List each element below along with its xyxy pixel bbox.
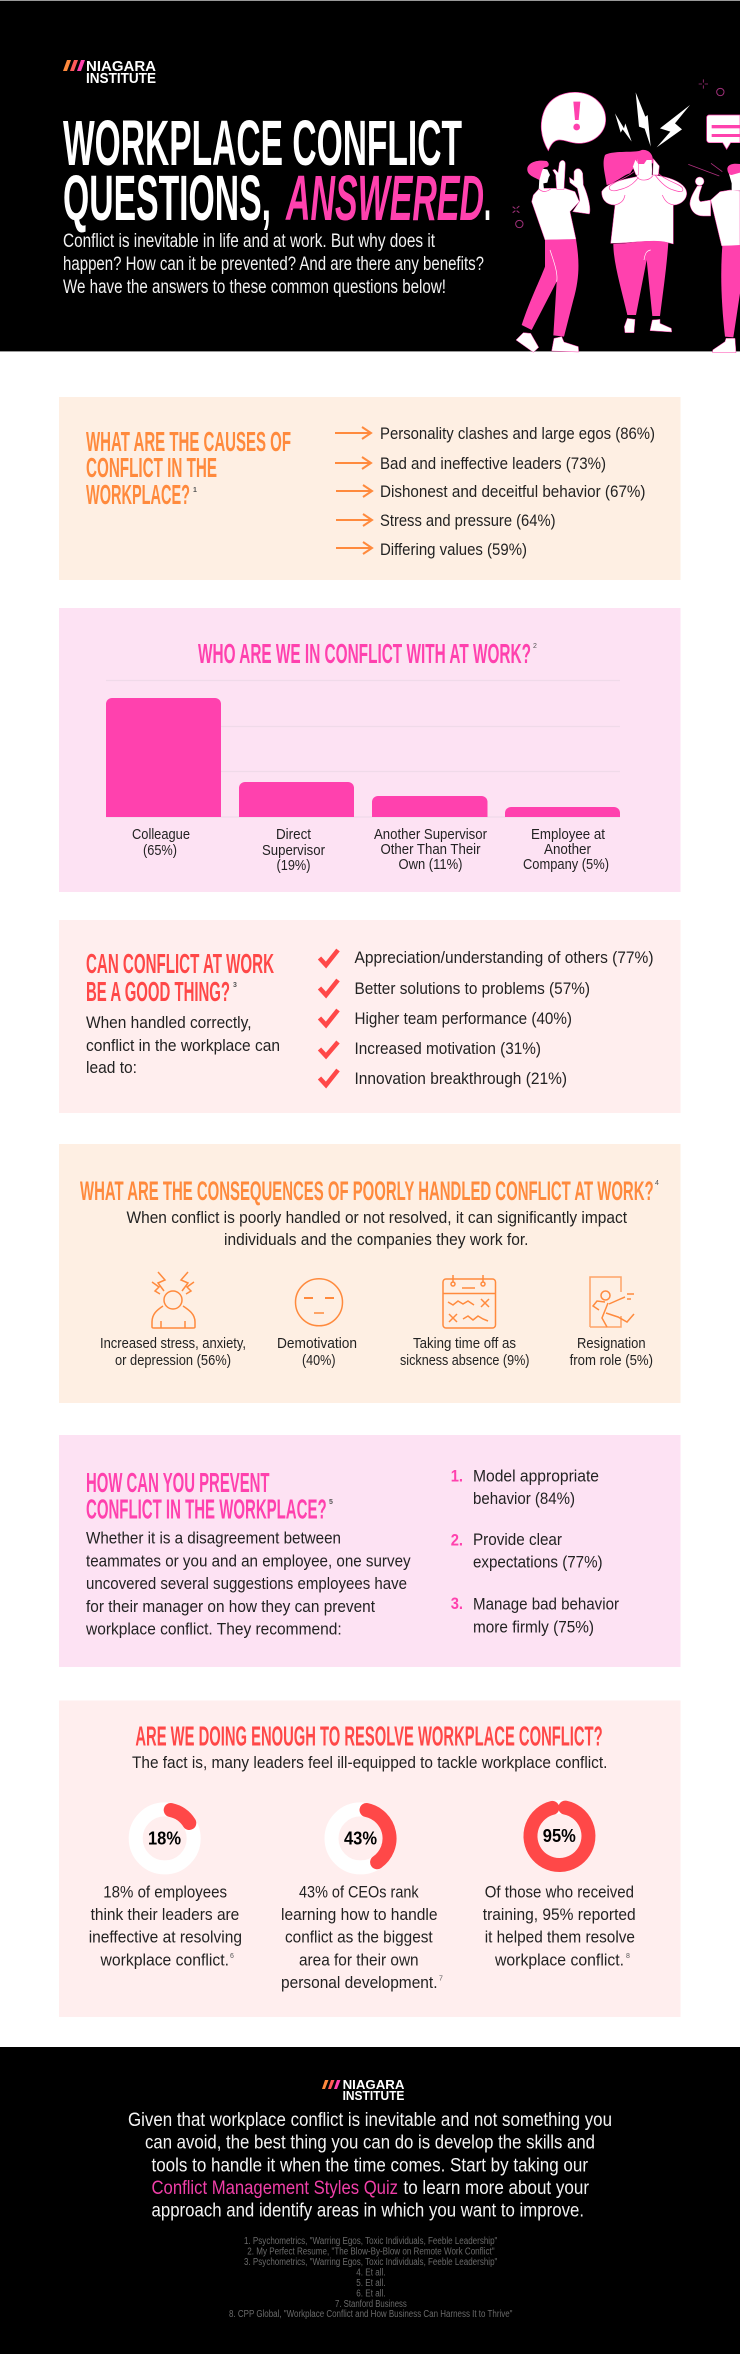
icon: person leaving through door [590, 1277, 634, 1327]
consequence labels: Demotivation [277, 1335, 357, 1352]
list: benefits: Better solutions to problems (57%) [354, 979, 590, 998]
heading: good thing [86, 948, 274, 1007]
logo: NIAGARA [86, 58, 156, 75]
list: causes: Stress and pressure (64%) [380, 511, 556, 530]
panel: can conflict be good [59, 920, 680, 1113]
chart labels: Own (11%) [398, 856, 462, 873]
chart labels: (65%) [143, 842, 177, 859]
text: prevent body: for their manager on how they can prevent [86, 1597, 375, 1616]
closing text: approach and identify areas in which you want to improve. [152, 2201, 584, 2222]
heading: causes: 1 [193, 487, 197, 494]
intro text: We have the answers to these common questions below! [63, 277, 446, 298]
intro text: happen? How can it be prevented? And are there any benefits? [63, 254, 484, 275]
text: 95% caption: Of those who received [485, 1882, 634, 1901]
text: when handled correctly [86, 1013, 280, 1077]
heading: consequences: 4 [655, 1180, 659, 1187]
list: causes: Differing values (59%) [380, 540, 527, 559]
panel: who are we in conflict with [59, 608, 680, 892]
closing text: to learn more about your [404, 2178, 590, 2199]
text: leaders ill-equipped: The fact is, many leaders feel ill-equipped to tackle workplace conflict. [132, 1753, 607, 1772]
logo: INSTITUTE [86, 70, 156, 87]
consequence labels [100, 1335, 653, 1369]
text: 43% caption: conflict as the biggest [285, 1928, 433, 1947]
heading: causes: CONFLICT IN THE [86, 452, 217, 483]
illustration: three people in conflict [513, 79, 740, 353]
footnotes: 6. Et all. [356, 2289, 386, 2300]
text: 95% caption: it helped them resolve [485, 1928, 635, 1947]
text: prevent body: teammates or you and an employee, one survey [86, 1551, 411, 1570]
closing text: can avoid, the best thing you can do is develop the skills and [145, 2133, 595, 2154]
text: 95% caption: workplace conflict. [494, 1951, 624, 1970]
text: prevent body: uncovered several suggestions employees have [86, 1574, 407, 1593]
heading: prevent: 5 [329, 1499, 333, 1506]
heading: who [198, 638, 537, 669]
text: 95% caption: training, 95% reported [483, 1905, 636, 1924]
text: 43% caption: learning how to handle [281, 1905, 438, 1924]
chart labels: Direct [276, 826, 312, 843]
text: when handled correctly: conflict in the workplace can [86, 1036, 280, 1055]
text: 95% caption: 8 [626, 1953, 630, 1960]
panel: are we doing enough [59, 1700, 680, 2017]
text: 18% caption [89, 1882, 242, 1970]
panel: prevent conflict [59, 1435, 680, 1667]
heading: causes: WORKPLACE? [86, 479, 190, 510]
title: QUESTIONS, [63, 162, 271, 234]
panel: causes of conflict [59, 397, 680, 580]
numbered list: recommendations: Model appropriate [473, 1467, 599, 1486]
closing text: tools to handle it when the time comes. Start by taking our [152, 2155, 589, 2176]
heading: good thing: BE A GOOD THING? [86, 976, 230, 1007]
footnotes: 1. Psychometrics, "Warring Egos, Toxic Individuals, Feeble Leadership" [244, 2236, 498, 2247]
text: prevent body: workplace conflict. They recommend: [85, 1620, 342, 1639]
panel: consequences [59, 1144, 680, 1403]
heading: prevent: CONFLICT IN THE WORKPLACE? [86, 1494, 327, 1524]
text: 43% caption [281, 1882, 443, 1992]
heading: who: 2 [533, 643, 537, 650]
text: consequences intro: When conflict is poorly handled or not resolved, it can significantly impact [126, 1208, 627, 1227]
list: causes: Bad and ineffective leaders (73%) [380, 454, 606, 473]
chart labels: Other Than Their [380, 841, 481, 858]
consequence labels: from role (5%) [570, 1352, 653, 1369]
chart labels: Colleague [132, 826, 190, 843]
text: 43% caption: area for their own [299, 1951, 419, 1970]
icon: stressed person [152, 1272, 195, 1328]
list: causes: Dishonest and deceitful behavior (67%) [380, 482, 646, 501]
numbered list: recommendations: behavior (84%) [473, 1489, 575, 1508]
list: benefits: Increased motivation (31%) [354, 1039, 541, 1058]
title [63, 107, 491, 234]
text: prevent body [85, 1528, 411, 1639]
bar chart [106, 680, 620, 817]
chart labels: Employee at [531, 826, 606, 843]
donut chart: 95% [530, 1807, 588, 1865]
consequence labels: Taking time off as [413, 1335, 516, 1352]
text: 18% caption: think their leaders are [91, 1905, 239, 1924]
chart labels [132, 826, 609, 874]
text: when handled correctly: lead to: [86, 1058, 137, 1077]
chart labels: Another Supervisor [374, 826, 487, 843]
header panel: . [484, 162, 491, 234]
heading: prevent [86, 1467, 333, 1524]
heading: good thing: CAN CONFLICT AT WORK [86, 948, 274, 979]
numbered list: recommendations: Manage bad behavior [473, 1594, 619, 1613]
numbered list: recommendations [451, 1466, 619, 1636]
text: 43% caption: 7 [439, 1976, 443, 1982]
text: 18% caption: 6 [230, 1953, 234, 1960]
list: benefits: Higher team performance (40%) [354, 1009, 572, 1028]
text: 18% caption: 18% of employees [103, 1882, 227, 1901]
footer panel [0, 2047, 740, 2354]
chart labels: Company (5%) [523, 856, 609, 873]
intro text [63, 231, 484, 298]
donut chart: 18%: 18% [148, 1829, 181, 1849]
numbered list: recommendations: 2. [451, 1531, 463, 1550]
closing text: Conflict Management Styles Quiz [152, 2178, 398, 2199]
numbered list: recommendations: more firmly (75%) [473, 1617, 594, 1636]
heading: prevent: HOW CAN YOU PREVENT [86, 1467, 270, 1498]
donut chart: 18% [136, 1809, 194, 1867]
consequence labels: or depression (56%) [115, 1352, 231, 1369]
footer logo [322, 2077, 405, 2103]
closing text [128, 2110, 612, 2222]
heading: causes [86, 426, 291, 510]
chart labels: Supervisor [262, 842, 325, 859]
text: when handled correctly: When handled correctly, [86, 1013, 252, 1032]
icon: arrows [335, 427, 372, 554]
donut chart: 43%: 43% [344, 1829, 377, 1849]
icon: calendar [443, 1275, 496, 1328]
text: consequences intro: individuals and the companies they work for. [224, 1230, 528, 1249]
heading: good thing: 3 [233, 982, 237, 989]
heading: causes: WHAT ARE THE CAUSES OF [86, 426, 291, 457]
list: benefits [354, 948, 654, 1088]
text: 18% caption: ineffective at resolving [89, 1928, 242, 1947]
numbered list: recommendations: 1. [451, 1466, 463, 1485]
donut chart: 95%: 95% [543, 1826, 576, 1846]
list: causes [380, 424, 655, 559]
text: 18% caption: workplace conflict. [100, 1951, 229, 1970]
list: benefits: Appreciation/understanding of others (77%) [354, 948, 654, 967]
footnotes: 8. CPP Global, "Workplace Conflict and How Business Can Harness It to Thrive" [229, 2309, 513, 2320]
chart labels: Another [544, 841, 591, 858]
text: 43% caption: 43% of CEOs rank [299, 1882, 419, 1901]
footnotes: 3. Psychometrics, "Warring Egos, Toxic Individuals, Feeble Leadership" [244, 2257, 498, 2268]
footnotes [229, 2236, 513, 2320]
footnotes: 7. Stanford Business [335, 2299, 407, 2310]
consequence labels: Increased stress, anxiety, [100, 1335, 246, 1352]
footnotes: 4. Et all. [356, 2268, 386, 2279]
list: causes: Personality clashes and large egos (86%) [380, 424, 655, 443]
list: benefits: Innovation breakthrough (21%) [354, 1069, 567, 1088]
icon: checkmarks [320, 950, 338, 1085]
consequence labels: Resignation [577, 1335, 646, 1352]
title: ANSWERED [285, 162, 484, 234]
text: 95% caption [483, 1882, 636, 1970]
intro text: Conflict is inevitable in life and at work. But why does it [63, 231, 436, 252]
text: consequences intro [126, 1208, 627, 1249]
text: prevent body: Whether it is a disagreement between [86, 1528, 341, 1547]
icon: demotivated face [296, 1279, 342, 1326]
footnotes: 5. Et all. [356, 2278, 386, 2289]
donut chart: 43% [332, 1809, 390, 1867]
footer logo: INSTITUTE [343, 2088, 405, 2103]
numbered list: recommendations: Provide clear [473, 1530, 562, 1549]
footnotes: 2. My Perfect Resume, "The Blow-By-Blow on Remote Work Conflict" [247, 2247, 495, 2258]
closing text: Given that workplace conflict is inevitable and not something you [128, 2110, 612, 2131]
logo [63, 58, 156, 87]
consequence labels: sickness absence (9%) [400, 1352, 530, 1369]
footer logo: NIAGARA [343, 2077, 405, 2092]
numbered list: recommendations: expectations (77%) [473, 1552, 603, 1572]
header panel [0, 0, 740, 353]
numbered list: recommendations: 3. [451, 1594, 463, 1613]
text: 43% caption: personal development. [281, 1973, 438, 1992]
consequence labels: (40%) [302, 1352, 336, 1369]
chart labels: (19%) [276, 857, 311, 874]
